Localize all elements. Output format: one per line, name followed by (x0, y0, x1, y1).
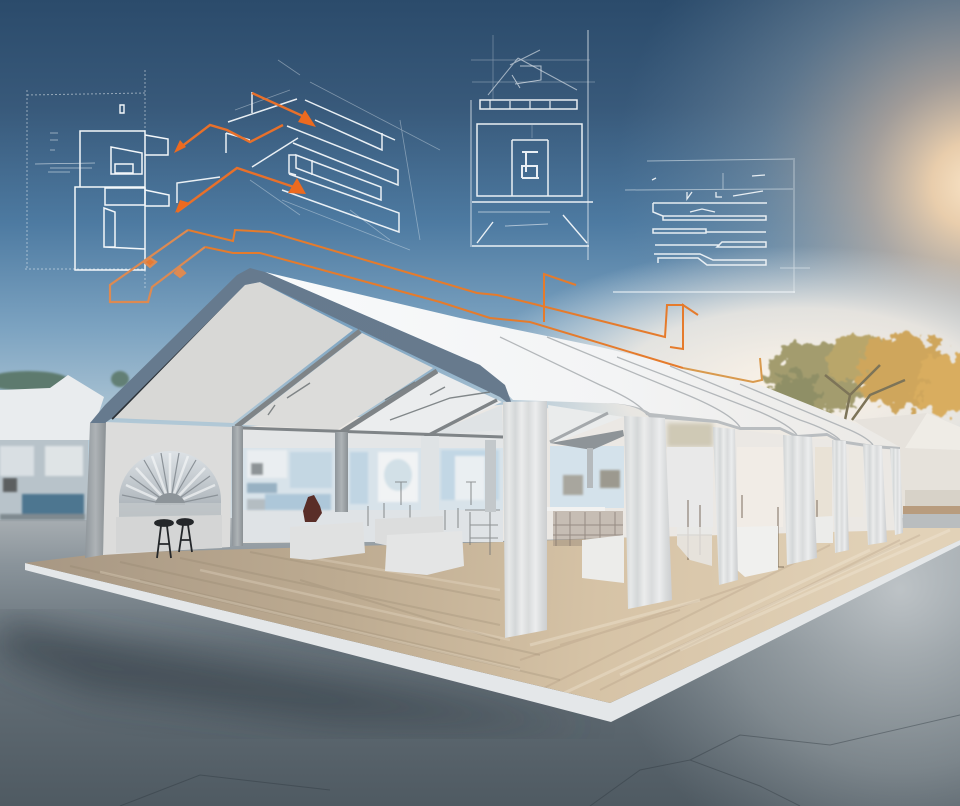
background tent left (0, 375, 104, 520)
wood floor (25, 528, 960, 703)
white cube tables (290, 516, 833, 583)
middle front post (232, 426, 243, 546)
bar counter and chairs (545, 507, 623, 546)
interior ceiling bays (243, 333, 624, 450)
interior posts (335, 432, 593, 518)
ground shadow under platform (0, 620, 600, 728)
trees left (0, 371, 129, 391)
platform side (25, 540, 960, 722)
gable dark edge (112, 285, 243, 419)
orange route along roof, left (110, 230, 205, 302)
sky background (0, 0, 960, 530)
wall lower panel (116, 515, 222, 553)
ceiling track lights (268, 382, 490, 420)
blueprint: left floor plan (25, 70, 169, 290)
blueprint: center perspective (177, 60, 440, 250)
blueprint: right section (613, 158, 810, 293)
interior back wall (232, 404, 903, 543)
arched fan window (119, 451, 221, 517)
floor planks (70, 530, 950, 695)
interior event scene right (545, 423, 863, 567)
curtains (503, 401, 903, 638)
sun glow (500, 0, 960, 530)
orange arrowheads (174, 110, 316, 213)
roof shadow lip (513, 400, 900, 450)
interior event scene left (243, 430, 503, 555)
person seated at table (303, 495, 322, 522)
ground light on the right (600, 518, 960, 806)
front left post (85, 422, 106, 558)
blueprint: top-center elevation (471, 30, 595, 260)
bar stools (155, 519, 193, 558)
gold route end (683, 358, 762, 382)
ceiling beams (236, 331, 608, 442)
trees right (765, 334, 960, 420)
roof seams (500, 337, 873, 445)
background tent right (853, 413, 960, 530)
gable frame (90, 268, 513, 423)
ground (0, 518, 960, 806)
roof fabric (265, 272, 900, 447)
end wall (103, 422, 232, 555)
gable inner panel (112, 282, 353, 423)
horizon haze (430, 240, 960, 530)
ground cracks (120, 715, 960, 806)
orange routing arrows top (177, 93, 307, 212)
orange route along roof (188, 230, 698, 368)
